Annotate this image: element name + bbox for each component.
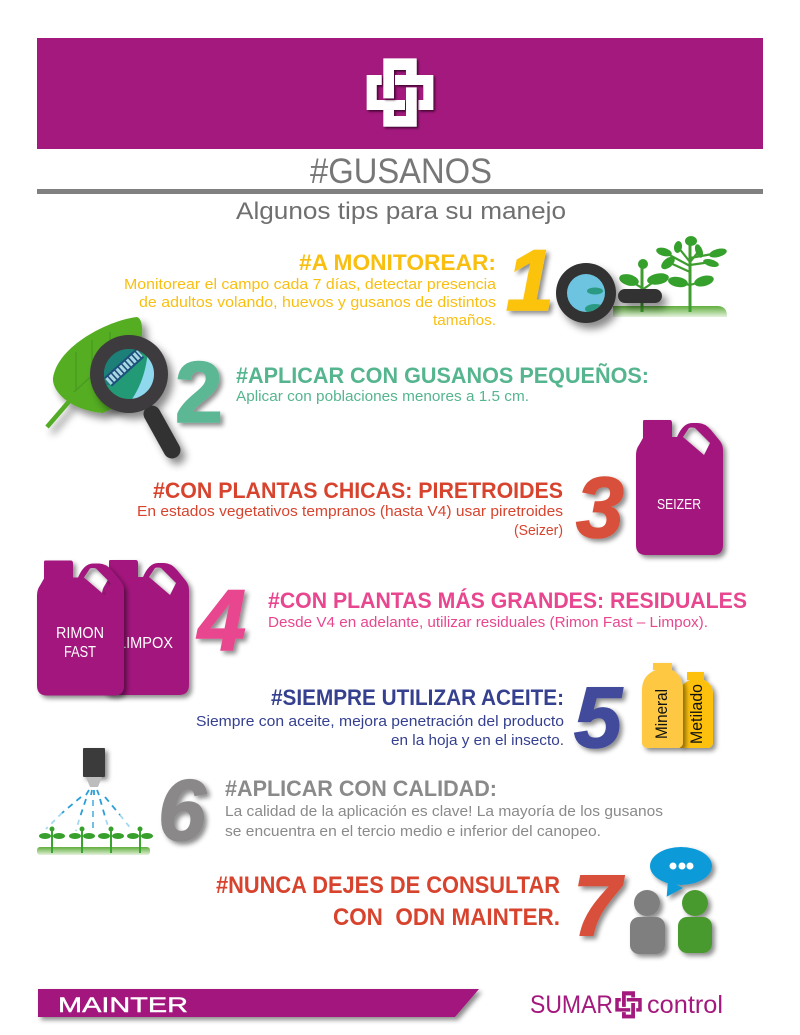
icon: jug SEIZER xyxy=(636,420,723,555)
heading 7: CON ODN MAINTER. xyxy=(333,904,560,931)
icon: jug RIMON FAST: FAST xyxy=(64,644,96,661)
panel: step 4 xyxy=(37,560,747,696)
icon: bottles xyxy=(642,663,713,748)
text 6 xyxy=(225,803,663,840)
header band xyxy=(37,38,763,149)
icon: leaf xyxy=(47,317,142,427)
icon: jug RIMON FAST: RIMON xyxy=(56,625,104,642)
icon: magnifier 1 xyxy=(556,263,662,323)
text 3 xyxy=(137,503,563,539)
text 3: En estados vegetativos tempranos (hasta V4) usar piretroides xyxy=(137,503,563,520)
text 5: Siempre con aceite, mejora penetración del producto xyxy=(196,713,564,730)
heading 7: #NUNCA DEJES DE CONSULTAR xyxy=(216,872,560,899)
footer brand: MAINTER xyxy=(58,994,188,1017)
text 1: Monitorear el campo cada 7 días, detectar presencia xyxy=(124,276,497,293)
panel: step 2 xyxy=(47,317,649,450)
footer logo xyxy=(530,991,723,1019)
panel: step 5 xyxy=(196,663,713,766)
heading 6: #APLICAR CON CALIDAD: xyxy=(225,776,497,801)
text 1: de adultos volando, huevos y gusanos de distintos xyxy=(139,294,496,311)
icon: bottles: Metilado xyxy=(687,684,706,744)
heading 3: #CON PLANTAS CHICAS: PIRETROIDES xyxy=(153,478,563,503)
panel: step 6 xyxy=(37,748,663,859)
number 3: 3 xyxy=(576,460,624,556)
number 4: 4 xyxy=(196,573,246,669)
text 5: en la hoja y en el insecto. xyxy=(391,732,564,749)
title: #GUSANOS xyxy=(310,152,492,191)
number 2: 2 xyxy=(175,345,223,441)
panel: step 1 xyxy=(124,233,728,329)
text 1: tamaños. xyxy=(433,312,496,329)
number 7: 7 xyxy=(573,858,625,954)
text 6: se encuentra en el tercio medio e inferior del canopeo. xyxy=(225,823,601,840)
heading 1: #A MONITOREAR: xyxy=(299,250,496,275)
subtitle: Algunos tips para su manejo xyxy=(236,198,566,225)
footer logo: SUMAR xyxy=(530,991,613,1019)
icon: people talking xyxy=(630,847,712,954)
number 1: 1 xyxy=(506,233,554,329)
text 6: La calidad de la aplicación es clave! La mayoría de los gusanos xyxy=(225,803,663,820)
icon: sprayer and plants xyxy=(37,748,153,855)
footer logo: control xyxy=(647,991,723,1019)
icon: jug SEIZER: SEIZER xyxy=(657,496,701,513)
icon: header logo xyxy=(367,58,433,127)
icon: bottles: Mineral xyxy=(652,689,671,739)
text 5 xyxy=(196,713,564,749)
text 4: Desde V4 en adelante, utilizar residuales (Rimon Fast – Limpox). xyxy=(268,614,708,631)
icon: jug RIMON FAST xyxy=(37,560,124,696)
text 2: Aplicar con poblaciones menores a 1.5 cm. xyxy=(236,388,529,405)
number 6: 6 xyxy=(158,763,207,859)
heading 2: #APLICAR CON GUSANOS PEQUEÑOS: xyxy=(236,363,649,388)
text 1 xyxy=(124,276,497,329)
icon: plants on ground xyxy=(613,236,728,317)
footer bar xyxy=(38,989,479,1017)
icon: magnifier 2 xyxy=(90,335,172,450)
heading 7 xyxy=(216,872,560,931)
heading 4: #CON PLANTAS MÁS GRANDES: RESIDUALES xyxy=(268,588,747,613)
panel: step 7 xyxy=(216,847,712,954)
divider xyxy=(37,189,763,194)
icon: jug LIMPOX: LIMPOX xyxy=(118,635,174,652)
text 3: (Seizer) xyxy=(514,522,563,539)
heading 5: #SIEMPRE UTILIZAR ACEITE: xyxy=(271,685,564,710)
number 5: 5 xyxy=(574,670,623,766)
icon: jug LIMPOX xyxy=(102,560,189,695)
panel: step 3 xyxy=(137,420,723,556)
